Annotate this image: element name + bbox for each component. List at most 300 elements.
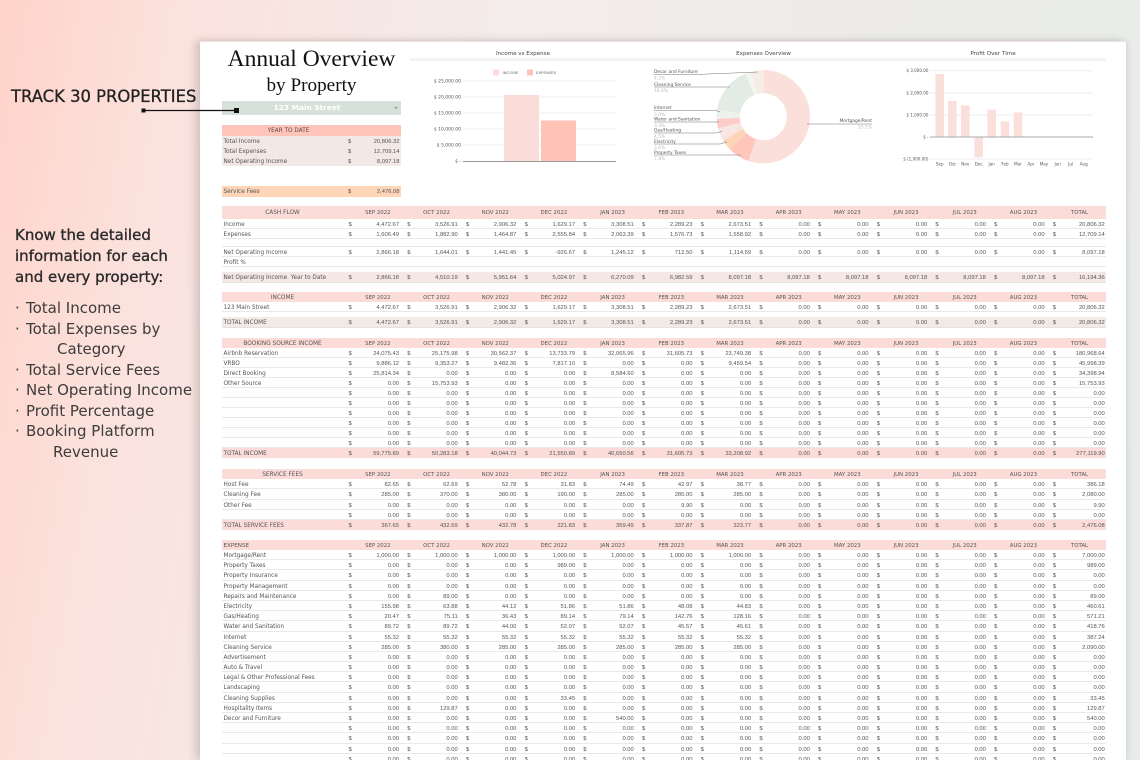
row: property management: $: [466, 584, 469, 590]
row: gas/heating: 0.00: [975, 614, 986, 620]
row: direct booking: $: [583, 371, 586, 377]
table: booking source income: $: [583, 411, 586, 417]
table: booking source income: $: [348, 421, 352, 427]
row: 123 main street: 20,806.32: [1079, 305, 1105, 311]
row: income: $: [407, 222, 410, 228]
row: vrbo: $: [1053, 361, 1056, 367]
table: booking source income: $: [935, 431, 939, 437]
table: service fees: 0.00: [916, 513, 927, 519]
row: airbnb reservation: Airbnb Reservation: [224, 351, 278, 357]
table: service fees: $: [1053, 513, 1056, 519]
row: repairs and maintenance: 89.00: [1090, 594, 1105, 600]
row: property insurance: $: [759, 573, 763, 579]
row: total income: $: [818, 320, 821, 326]
row: cleaning supplies: 0.00: [388, 696, 399, 702]
table: service fees: 0.00: [388, 513, 399, 519]
row: gas/heating: 79.14: [619, 614, 634, 620]
header row: MAR 2023: [716, 472, 744, 478]
row: legal and other professional fees: $: [525, 675, 528, 681]
row: vrbo: 0.00: [1033, 361, 1045, 367]
table: booking source income: $: [759, 411, 763, 417]
header row: OCT 2022: [423, 472, 450, 478]
row: cleaning fee: 380.00: [499, 492, 516, 498]
row: legal and other professional fees: $: [759, 675, 763, 681]
header row: JAN 2023: [600, 542, 625, 548]
row: expenses: 0.00: [857, 232, 868, 238]
row: host fee: $: [583, 482, 586, 488]
row: internet: [222, 632, 1106, 642]
row: vrbo: 45,998.39: [1079, 361, 1105, 367]
dropdown: property selector: 123 Main Street: [274, 103, 340, 112]
row: total income: 0.00: [799, 320, 810, 326]
row: expenses: $: [994, 232, 997, 238]
row: income: 4,472.67: [376, 222, 399, 228]
table: booking source income: 0.00: [799, 391, 810, 397]
table: expense: 0.00: [1033, 726, 1045, 732]
row: net operating income: $: [701, 250, 704, 256]
row: water and sanitation: [222, 621, 1106, 632]
row: legal and other professional fees: $: [466, 675, 469, 681]
table: booking source income: 0.00: [1093, 401, 1105, 407]
table: booking source income: $: [407, 421, 410, 427]
row: internet: 55.32: [443, 634, 458, 640]
table: expense: $: [994, 747, 997, 753]
row: total service fees: $: [701, 523, 704, 529]
row: advertisement: 0.00: [740, 655, 751, 661]
row: legal and other professional fees: 0.00: [622, 675, 634, 681]
table: booking source income: $: [1053, 401, 1056, 407]
row: cleaning service: $: [1053, 645, 1056, 651]
row: income: $: [759, 222, 763, 228]
row: total income: $: [466, 451, 469, 457]
table: booking source income: $: [1053, 441, 1056, 447]
row: water and sanitation: $: [466, 624, 469, 630]
row: total service fees: $: [994, 523, 997, 529]
header row: [222, 338, 1106, 348]
table: booking source income: 0.00: [681, 411, 692, 417]
table: expense: $: [583, 726, 586, 732]
axis labels: $ 3,000.00: [906, 68, 929, 73]
table: service fees: 0.00: [740, 513, 751, 519]
table: booking source income: $: [818, 401, 821, 407]
row: legal and other professional fees: Legal & Other Professional Fees: [224, 675, 315, 681]
row: cleaning fee: 0.00: [1033, 492, 1045, 498]
row: cleaning supplies: $: [877, 696, 880, 702]
row: hospitality items: $: [1053, 706, 1056, 712]
row: water and sanitation: 45.61: [737, 624, 751, 630]
row: 123 main street: [222, 302, 1106, 312]
header row: OCT 2022: [423, 542, 450, 548]
donut labels: 4.2%: [654, 76, 665, 82]
row: total income: $: [759, 320, 763, 326]
text block: know the detailed information: Know the detailed: [15, 226, 151, 244]
row: water and sanitation: $: [1053, 624, 1056, 630]
row: 123 main street: 2,906.32: [494, 305, 516, 311]
axis labels: $ (1,000.00): [903, 156, 929, 162]
row: mortgage/rent: 1,000.00: [494, 553, 516, 559]
table: booking source income: $: [877, 421, 880, 427]
row: electricity: $: [759, 604, 763, 610]
row: cleaning service: 285.00: [616, 645, 634, 651]
row: internet: $: [759, 634, 763, 640]
row: gas/heating: $: [701, 614, 704, 620]
row: internet: $: [407, 634, 410, 640]
row: landscaping: 0.00: [740, 685, 751, 691]
row: repairs and maintenance: 0.00: [505, 594, 516, 600]
header row: JUL 2023: [953, 295, 977, 301]
row: legal and other professional fees: $: [348, 675, 352, 681]
row: legal and other professional fees: $: [935, 675, 939, 681]
table: booking source income: 0.00: [446, 421, 458, 427]
table: booking source income: $: [466, 431, 469, 437]
row: 123 main street: $: [407, 305, 410, 311]
table: expense: $: [642, 736, 645, 742]
row: 123 main street: 0.00: [1033, 305, 1045, 311]
row: vrbo: $: [877, 361, 880, 367]
title: annual overview by property: [228, 46, 396, 96]
table: service fees: 0.00: [505, 513, 516, 519]
row: total income: 0.00: [975, 451, 986, 457]
row: income: $: [818, 222, 821, 228]
row: property taxes: $: [994, 563, 997, 569]
row: legal and other professional fees: $: [407, 675, 410, 681]
header row: SEP 2022: [365, 472, 391, 478]
row: 123 main street: $: [1053, 305, 1056, 311]
table: booking source income: 0.00: [1093, 441, 1105, 447]
table: booking source income: 0.00: [799, 431, 810, 437]
row: property insurance: $: [994, 573, 997, 579]
row: other source: 0.00: [857, 381, 868, 387]
row: cleaning service: Cleaning Service: [224, 645, 272, 651]
header row: SEP 2022: [365, 542, 391, 548]
row: cleaning service: 0.00: [975, 645, 986, 651]
row: 123 main street: 3,308.51: [611, 305, 634, 311]
row: total service fees: [222, 520, 1106, 530]
donut labels: Gas/Heating: [654, 128, 681, 134]
header row: APR 2023: [776, 472, 802, 478]
row: total service fees: $: [759, 523, 763, 529]
table: expense: $: [348, 736, 352, 742]
row: cleaning service: 2,090.00: [1082, 645, 1105, 651]
row: vrbo: VRBO: [224, 361, 240, 367]
table: service fees: $: [466, 513, 469, 519]
row: mortgage/rent: $: [466, 553, 469, 559]
table: booking source income: $: [407, 401, 410, 407]
row: water and sanitation: $: [583, 624, 586, 630]
row: property management: 0.00: [622, 584, 634, 590]
row: total income: $: [701, 451, 704, 457]
row: 123 main street: $: [935, 305, 939, 311]
row: total income: $: [935, 451, 939, 457]
row: other source: $: [994, 381, 997, 387]
row: host fee: $: [1053, 482, 1056, 488]
row: net operating income year to date: 5,951.64: [494, 275, 516, 281]
row: net operating income: $: [935, 250, 939, 256]
row: total income: 0.00: [975, 320, 986, 326]
table: service fees: $: [818, 513, 821, 519]
row: total service fees: 221.83: [557, 523, 575, 529]
header row: MAR 2023: [716, 542, 744, 548]
row: internet: 0.00: [975, 634, 986, 640]
row: internet: 0.00: [1033, 634, 1045, 640]
row: legal and other professional fees: [222, 672, 1106, 682]
table: booking source income: $: [407, 431, 410, 437]
header row: MAY 2023: [834, 472, 861, 478]
row: total income: $: [583, 320, 586, 326]
row: cleaning supplies: Cleaning Supplies: [224, 696, 275, 702]
row: net operating income year to date: $: [525, 275, 528, 281]
table: booking source income: 0.00: [388, 431, 399, 437]
table: booking source income: $: [1053, 411, 1056, 417]
table: expense: $: [1053, 736, 1056, 742]
table: expense: 0.00: [1093, 736, 1105, 742]
table: booking source income: 0.00: [681, 421, 692, 427]
row: gas/heating: 142.76: [675, 614, 692, 620]
table: expense: 0.00: [505, 747, 516, 753]
row: auto and travel: $: [583, 665, 586, 671]
table: booking source income: $: [759, 401, 763, 407]
row: total service fees: $: [466, 523, 469, 529]
row: airbnb reservation: 25,175.98: [432, 351, 458, 357]
row: property insurance: $: [466, 573, 469, 579]
row: income: 0.00: [975, 222, 986, 228]
row: landscaping: 0.00: [975, 685, 986, 691]
table: expense: $: [525, 747, 528, 753]
row: water and sanitation: 52.07: [619, 624, 634, 630]
row: total income: 20,806.32: [374, 139, 400, 145]
row: property taxes: $: [348, 563, 352, 569]
table: booking source income: $: [877, 431, 880, 437]
row: auto and travel: 0.00: [505, 665, 516, 671]
row: water and sanitation: 0.00: [799, 624, 810, 630]
row: 123 main street: $: [818, 305, 821, 311]
row: landscaping: $: [935, 685, 939, 691]
row: decor and furniture: $: [994, 716, 997, 722]
row: airbnb reservation: 0.00: [916, 351, 927, 357]
header row: MAR 2023: [716, 340, 744, 346]
bullet list: property information: ·: [15, 422, 20, 440]
bullet list: property information: Total Income: [26, 299, 121, 317]
row: property insurance: $: [348, 573, 352, 579]
row: host fee: Host Fee: [224, 482, 248, 488]
row: cleaning fee: 370.00: [440, 492, 458, 498]
row: vrbo: 0.00: [622, 361, 634, 367]
row: hospitality items: Hospitality Items: [224, 706, 272, 712]
row: direct booking: $: [994, 371, 997, 377]
table: expense: $: [877, 726, 880, 732]
month labels: Jan: [988, 162, 995, 166]
row: electricity: 0.00: [1033, 604, 1045, 610]
row: auto and travel: $: [935, 665, 939, 671]
row: gas/heating: $: [759, 614, 763, 620]
row: gas/heating: $: [466, 614, 469, 620]
row: cleaning service: $: [583, 645, 586, 651]
row: landscaping: 0.00: [505, 685, 516, 691]
row: direct booking: $: [348, 371, 352, 377]
row: water and sanitation: 45.57: [678, 624, 692, 630]
row: advertisement: 0.00: [857, 655, 868, 661]
donut labels: [654, 69, 872, 162]
row: property insurance: 0.00: [388, 573, 399, 579]
row: legal and other professional fees: $: [642, 675, 645, 681]
header row: AUG 2023: [1010, 542, 1037, 548]
row: hospitality items: $: [583, 706, 586, 712]
row: water and sanitation: $: [642, 624, 645, 630]
row: mortgage/rent: $: [1053, 553, 1056, 559]
row: water and sanitation: $: [701, 624, 704, 630]
row: mortgage/rent: [222, 550, 1106, 560]
row: direct booking: 0.00: [505, 371, 516, 377]
row: net operating income: 712.50: [675, 250, 692, 256]
table: expense: 0.00: [916, 747, 927, 753]
row: mortgage/rent: $: [818, 553, 821, 559]
row: total income: 4,472.67: [376, 320, 399, 326]
row: property management: $: [348, 584, 352, 590]
table: expense: 0.00: [622, 726, 634, 732]
table: booking source income: 0.00: [446, 431, 458, 437]
row: other source: $: [407, 381, 410, 387]
row: electricity: $: [701, 604, 704, 610]
row: water and sanitation: 0.00: [1033, 624, 1045, 630]
row: airbnb reservation: $: [759, 351, 763, 357]
header row: FEB 2023: [658, 542, 684, 548]
row: property management: $: [642, 584, 645, 590]
table: booking source income: 0.00: [916, 411, 927, 417]
row: cleaning fee: Cleaning Fee: [224, 492, 261, 498]
table: booking source income: $: [525, 401, 528, 407]
row: host fee: $: [935, 482, 939, 488]
donut labels: Cleaning Service: [654, 82, 691, 88]
table: booking source income: $: [642, 411, 645, 417]
row: direct booking: $: [1053, 371, 1056, 377]
row: gas/heating: $: [642, 614, 645, 620]
table: booking source income: 0.00: [681, 391, 692, 397]
row: property management: 0.00: [446, 584, 458, 590]
row: direct booking: $: [818, 371, 821, 377]
table: booking source income: 0.00: [564, 431, 575, 437]
row: cleaning fee: $: [759, 492, 763, 498]
row: vrbo: $: [759, 361, 763, 367]
row: electricity: $: [525, 604, 528, 610]
row: internet: 0.00: [799, 634, 810, 640]
row: mortgage/rent: 0.00: [1033, 553, 1045, 559]
row: total income: 59,775.89: [373, 451, 399, 457]
row: mortgage/rent: 1,000.00: [376, 553, 399, 559]
table: booking source income: 0.00: [622, 401, 634, 407]
table: booking source income: 0.00: [505, 401, 516, 407]
header row: NOV 2022: [482, 542, 509, 548]
axis labels: $ 1,000.00: [906, 112, 929, 118]
row: host fee: $: [407, 482, 410, 488]
row: net operating income year to date: 2,866.18: [376, 275, 399, 281]
row: other source: 0.00: [1033, 381, 1045, 387]
table: service fees: 0.00: [857, 513, 868, 519]
row: electricity: Electricity: [224, 604, 252, 610]
axis labels: $ 15,000.00: [434, 110, 461, 116]
row: property insurance: $: [583, 573, 586, 579]
row: 123 main street: 0.00: [975, 305, 986, 311]
row: profit percent: Profit %: [224, 260, 246, 266]
row: hospitality items: 129.87: [440, 706, 458, 712]
table: booking source income: $: [877, 401, 880, 407]
header row: DEC 2022: [541, 340, 567, 346]
row: cleaning fee: 285.00: [616, 492, 634, 498]
table: booking source income: 0.00: [388, 421, 399, 427]
row: gas/heating: 0.00: [916, 614, 927, 620]
table: booking source income: 0.00: [857, 391, 868, 397]
row: total income: $: [877, 320, 880, 326]
row: mortgage/rent: 0.00: [857, 553, 868, 559]
row: other source: $: [642, 381, 645, 387]
row: net operating income year to date: 6,270.09: [611, 275, 634, 281]
row: income: 0.00: [857, 222, 868, 228]
row: net operating income: 1,441.45: [494, 250, 516, 256]
table: booking source income: 0.00: [1033, 431, 1045, 437]
row: direct booking: $: [466, 371, 469, 377]
row: cleaning supplies: $: [466, 696, 469, 702]
row: cleaning supplies: $: [583, 696, 586, 702]
bullet list: property information: ·: [15, 320, 20, 338]
row: property management: $: [994, 584, 997, 590]
row: host fee: 31.83: [561, 482, 575, 488]
table: booking source income: $: [407, 391, 410, 397]
row: auto and travel: 0.00: [564, 665, 575, 671]
row: internet: 55.32: [502, 634, 516, 640]
row: hospitality items: $: [525, 706, 528, 712]
row: advertisement: $: [642, 655, 645, 661]
row: decor and furniture: 0.00: [916, 716, 927, 722]
row: property management: 0.00: [681, 584, 692, 590]
table: booking source income: 0.00: [446, 411, 458, 417]
row: total expenses: $: [348, 149, 351, 155]
row: host fee: 52.78: [502, 482, 516, 488]
legend: INCOME: [502, 70, 519, 75]
row: total service fees: $: [935, 523, 939, 529]
header row: JAN 2023: [600, 472, 625, 478]
row: property management: $: [818, 584, 821, 590]
header row: JUN 2023: [894, 472, 919, 478]
row: total income: 0.00: [799, 451, 810, 457]
row: total income: 3,308.51: [611, 320, 634, 326]
header row: AUG 2023: [1010, 295, 1037, 301]
donut labels: 3.0%: [654, 112, 665, 118]
row: decor and furniture: 0.00: [505, 716, 516, 722]
row: electricity: 0.00: [916, 604, 927, 610]
row: mortgage/rent: 1,000.00: [670, 553, 692, 559]
row: 123 main street: $: [466, 305, 469, 311]
table: service fees: $: [994, 513, 997, 519]
row: hospitality items: 129.87: [1087, 706, 1105, 712]
table: booking source income: 0.00: [564, 421, 575, 427]
bullet list: property information: Revenue: [53, 442, 118, 460]
row: property insurance: 0.00: [505, 573, 516, 579]
table: expense: $: [994, 736, 997, 742]
row: repairs and maintenance: 0.00: [681, 594, 692, 600]
row: property taxes: 0.00: [505, 563, 516, 569]
row: landscaping: 0.00: [622, 685, 634, 691]
row: repairs and maintenance: 0.00: [564, 594, 575, 600]
row: total expenses: Total Expenses: [224, 149, 266, 155]
row: cleaning fee: 2,080.00: [1082, 492, 1105, 498]
row: 123 main street: $: [583, 305, 586, 311]
row: repairs and maintenance: 0.00: [388, 594, 399, 600]
row: vrbo: 7,817.10: [552, 361, 575, 367]
row: total service fees: $: [642, 523, 645, 529]
row: mortgage/rent: $: [759, 553, 763, 559]
row: repairs and maintenance: $: [642, 594, 645, 600]
chart title: Expenses Overview: [736, 51, 791, 57]
row: total income: $: [1053, 320, 1056, 326]
